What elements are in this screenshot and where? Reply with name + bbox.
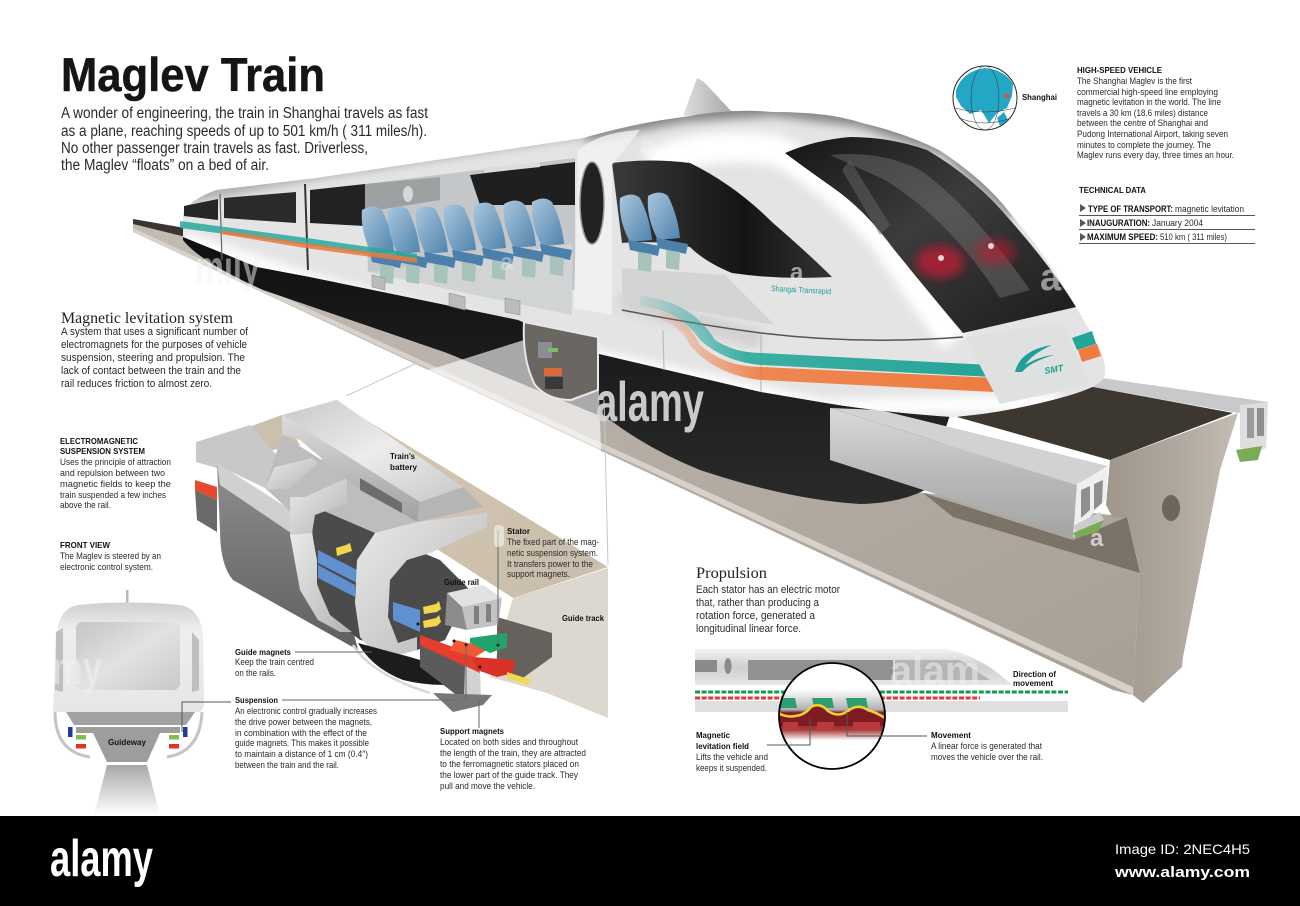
green dashed stators xyxy=(695,690,1068,694)
text: magnetic levitation field: Lifts the vehicle and xyxy=(696,752,768,762)
rail bracket xyxy=(420,637,480,700)
leaders xyxy=(767,712,927,745)
intro paragraph xyxy=(61,105,429,174)
text: suspension: to maintain a distance of 1 cm (0.4″) xyxy=(235,749,368,759)
upper left slab xyxy=(196,425,290,488)
front side window xyxy=(612,160,832,278)
text: magnetic levitation field: levitation field xyxy=(696,741,749,751)
concrete guide track block xyxy=(490,568,608,718)
text: suspension: Suspension xyxy=(235,695,278,705)
image id: Image ID: 2NEC4H5 xyxy=(1115,841,1250,857)
globe icon xyxy=(953,66,1017,130)
technical data: magnetic levitation xyxy=(1175,204,1244,214)
front frame xyxy=(355,513,487,660)
text: suspension: guide magnets. This makes it possible xyxy=(235,738,369,748)
red magnet blocks xyxy=(783,722,880,730)
rear deck slab xyxy=(249,415,300,452)
text: magnetic levitation system: lack of contact between the train and the xyxy=(61,365,241,377)
text: suspension: in combination with the effect of the xyxy=(235,728,367,738)
footer logo: alamy xyxy=(50,830,153,888)
label: guide track: Guide track xyxy=(562,613,604,623)
stator halo xyxy=(494,525,504,547)
text: high-speed vehicle: Maglev runs every day, three times an hour. xyxy=(1077,150,1234,160)
undercarriage xyxy=(183,232,951,504)
skirts xyxy=(55,712,202,757)
antenna xyxy=(126,590,128,603)
blue guide magnet, rear xyxy=(318,550,357,597)
illustration: propulsion diagram xyxy=(695,649,1068,769)
vents on the skirt xyxy=(372,275,520,315)
black shell bottom xyxy=(358,643,467,685)
text: magnetic levitation system: A system that uses a significant number of xyxy=(61,326,249,338)
red dashed magnets xyxy=(695,696,980,700)
miniature windows xyxy=(695,658,990,680)
text: electromagnetic suspension system: ELECTROMAGNETIC xyxy=(60,436,138,446)
illustration: maglev train on guideway xyxy=(133,78,1268,703)
technical data: MAXIMUM SPEED: xyxy=(1087,232,1158,242)
text: support magnets xyxy=(440,726,586,791)
technical data: January 2004 xyxy=(1152,218,1203,228)
frame backing silhouette xyxy=(265,435,487,603)
text: guide magnets: Keep the train centred xyxy=(235,657,314,667)
guide rail xyxy=(445,585,502,630)
intro paragraph: No other passenger train travels as fast. Driverless, xyxy=(61,140,368,157)
passenger seats xyxy=(362,192,688,284)
text: high-speed vehicle: HIGH-SPEED VEHICLE xyxy=(1077,65,1162,75)
watermark overlays: a xyxy=(500,249,514,276)
watermark overlays: my xyxy=(52,642,102,694)
text: magnetic levitation system xyxy=(61,310,249,390)
text: movement: moves the vehicle over the rail. xyxy=(931,752,1043,762)
technical data: INAUGURATION: xyxy=(1087,218,1150,228)
front view body xyxy=(53,602,204,712)
red rail end xyxy=(195,480,217,532)
watermark overlays xyxy=(52,130,1104,694)
text: electromagnetic suspension system: SUSPENSION SYSTEM xyxy=(60,446,145,456)
guideway label: Guideway xyxy=(108,738,147,747)
shell top lip xyxy=(217,463,291,533)
text: guide magnets: Guide magnets xyxy=(235,647,291,657)
text: suspension: the drive power between the magnets, xyxy=(235,717,372,727)
label: train's battery: battery xyxy=(390,463,417,472)
text: propulsion: rotation force, generated a xyxy=(696,610,816,622)
watermark overlays: mily xyxy=(195,241,260,293)
text: magnetic levitation system: Magnetic levitation system xyxy=(61,310,233,327)
text: stator xyxy=(507,526,599,579)
text: magnetic levitation field: keeps it suspended. xyxy=(696,763,767,773)
label: guide rail: Guide rail xyxy=(444,577,479,587)
text: support magnets: pull and move the vehicle. xyxy=(440,781,535,791)
guideway concrete beam xyxy=(133,219,1140,695)
text: guide magnets: on the rails. xyxy=(235,668,276,678)
footer bar xyxy=(0,816,1300,906)
label: train's battery: Train’s xyxy=(390,452,415,461)
text: high-speed vehicle: minutes to complete the journey. The xyxy=(1077,140,1211,150)
text: magnetic levitation system: rail reduces friction to almost zero. xyxy=(61,378,212,390)
text: high-speed vehicle: Pudong International Airport, taking seven xyxy=(1077,129,1228,139)
bolt hole xyxy=(1162,495,1180,521)
text: high-speed vehicle: The Shanghai Maglev is the first xyxy=(1077,76,1193,86)
near guide rail xyxy=(830,408,1108,538)
illustration: front view of train xyxy=(53,590,231,815)
text: front view: The Maglev is steered by an xyxy=(60,551,161,561)
text: electromagnetic suspension system: and repulsion between two xyxy=(60,468,165,478)
text: stator: The fixed part of the mag- xyxy=(507,537,599,547)
red support magnets xyxy=(420,635,515,677)
intro paragraph: A wonder of engineering, the train in Shanghai travels as fast xyxy=(61,105,429,122)
front view magnets xyxy=(68,727,188,748)
text: front view: electronic control system. xyxy=(60,562,153,572)
front view side windows xyxy=(55,628,199,692)
far guide rail xyxy=(1093,377,1268,462)
watermark overlays: a xyxy=(640,130,656,161)
label: direction of movement xyxy=(1013,669,1056,688)
guideway cross-section xyxy=(76,727,180,762)
rear windows xyxy=(184,184,365,226)
livery text: Shangai Transrapid xyxy=(771,284,831,296)
zoom wedge from train to detail xyxy=(346,340,608,590)
watermark overlays: alamy xyxy=(596,370,704,433)
rear frame xyxy=(265,458,352,632)
text: support magnets: the lower part of the guide track. They xyxy=(440,770,579,780)
illustration: suspension cutaway detail xyxy=(195,400,608,728)
windshield xyxy=(785,137,1076,333)
train body xyxy=(183,111,1105,417)
label: direction of movement: Direction of xyxy=(1013,669,1056,679)
text: magnetic levitation system: suspension, steering and propulsion. The xyxy=(61,352,245,364)
yellow wave xyxy=(775,705,888,720)
text: support magnets: the length of the train, they are attracted xyxy=(440,748,586,758)
intro paragraph: the Maglev “floats” on a bed of air. xyxy=(61,157,269,174)
watermark overlays: alam xyxy=(890,649,980,693)
leaders xyxy=(282,530,498,728)
body seams xyxy=(220,184,963,392)
roof fin xyxy=(683,78,732,116)
nose panel xyxy=(965,322,1101,404)
technical data: TECHNICAL DATA xyxy=(1079,185,1146,195)
lower rail band xyxy=(695,687,1068,712)
text: magnetic levitation system: electromagnets for the purposes of vehicle xyxy=(61,339,247,351)
technical data xyxy=(1079,185,1255,244)
yellow arrows, front xyxy=(423,601,441,628)
front view reflection xyxy=(94,765,160,815)
text: stator: netic suspension system. xyxy=(507,548,598,558)
vehicle shell xyxy=(217,465,358,650)
text: suspension xyxy=(235,695,378,770)
text: electromagnetic suspension system xyxy=(60,436,171,510)
text: propulsion xyxy=(696,565,840,635)
intro paragraph: as a plane, reaching speeds of up to 501 km/h ( 311 miles/h). xyxy=(61,123,427,140)
text: front view xyxy=(60,540,161,572)
yellow arrows, rear xyxy=(336,543,352,556)
text: stator: It transfers power to the xyxy=(507,559,593,569)
guideway end face xyxy=(1106,413,1238,703)
technical data: 510 km ( 311 miles) xyxy=(1160,232,1227,242)
magnifier circle xyxy=(775,663,890,769)
stripes: teal and orange xyxy=(180,221,995,392)
text: guide magnets xyxy=(235,647,314,678)
body shading xyxy=(183,104,1060,408)
front view windscreen xyxy=(76,622,180,690)
blue guide magnet, front xyxy=(393,602,420,632)
technical data: TYPE OF TRANSPORT: xyxy=(1088,204,1173,214)
text: magnetic levitation field xyxy=(696,730,768,773)
yellow arrow, forward xyxy=(507,672,532,685)
text: front view: FRONT VIEW xyxy=(60,540,111,550)
text: propulsion: longitudinal linear force. xyxy=(696,623,801,635)
text: electromagnetic suspension system: above the rail. xyxy=(60,500,111,510)
footer url: www.alamy.com xyxy=(1114,864,1250,881)
battery xyxy=(282,400,483,522)
text: high-speed vehicle: commercial high-speed line employing xyxy=(1077,87,1218,97)
text: suspension: between the train and the rail. xyxy=(235,760,339,770)
watermark overlays: a xyxy=(790,259,804,286)
suspension leader xyxy=(182,702,231,732)
green stator blocks xyxy=(778,698,868,708)
cutaway hole in skirt xyxy=(524,322,598,400)
title: Maglev Train xyxy=(61,48,325,101)
text: propulsion: that, rather than producing a xyxy=(696,597,820,609)
text: magnetic levitation field: Magnetic xyxy=(696,730,730,740)
text: movement: A linear force is generated that xyxy=(931,741,1043,751)
text: high-speed vehicle: magnetic levitation in the world. The line xyxy=(1077,97,1221,107)
green stator xyxy=(470,633,507,653)
text: support magnets: Located on both sides and throughout xyxy=(440,737,579,747)
watermark overlays: a xyxy=(1090,525,1104,552)
text: propulsion: Propulsion xyxy=(696,565,767,582)
windshield reflections xyxy=(830,154,1030,298)
interior between frames xyxy=(310,505,470,650)
text: stator: support magnets. xyxy=(507,569,570,579)
logo: SMT: SMT xyxy=(1044,363,1066,376)
text: propulsion: Each stator has an electric motor xyxy=(696,584,840,596)
cavity top xyxy=(66,712,195,725)
cabin cutaway xyxy=(362,158,775,325)
text: movement: Movement xyxy=(931,730,971,740)
light shell rim xyxy=(353,645,430,693)
text: high-speed vehicle xyxy=(1077,65,1234,160)
text: high-speed vehicle: between the centre of Shanghai and xyxy=(1077,118,1208,128)
track deck xyxy=(320,400,608,598)
text: stator: Stator xyxy=(507,526,531,536)
watermark overlays: a xyxy=(1040,257,1062,299)
label: train's battery xyxy=(390,452,417,472)
text: movement xyxy=(931,730,1043,762)
magnetic field xyxy=(780,706,884,726)
guideway top surface xyxy=(957,387,1233,460)
text: electromagnetic suspension system: train suspended a few inches xyxy=(60,490,167,500)
text: support magnets: to the ferromagnetic stators placed on xyxy=(440,759,579,769)
leader dots xyxy=(416,622,500,668)
text: electromagnetic suspension system: magnetic fields to keep the xyxy=(60,479,171,489)
train door xyxy=(574,130,640,315)
globe label: Shanghai xyxy=(1022,93,1057,102)
text: support magnets: Support magnets xyxy=(440,726,504,736)
cab lights xyxy=(916,239,1015,278)
text: high-speed vehicle: travels a 30 km (18.6 miles) distance xyxy=(1077,108,1208,118)
label: direction of movement: movement xyxy=(1013,678,1053,688)
text: electromagnetic suspension system: Uses the principle of attraction xyxy=(60,457,171,467)
miniature train xyxy=(695,649,1012,685)
text: suspension: An electronic control gradually increases xyxy=(235,706,378,716)
